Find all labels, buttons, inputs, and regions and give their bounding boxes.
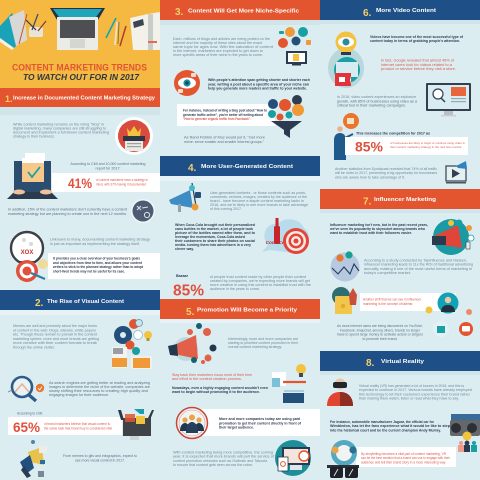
stat panel: 65%: of brand marketers believe that visual content is <box>44 422 110 426</box>
video intro text <box>370 35 464 43</box>
callout panel: storytelling <box>356 447 456 467</box>
icon: strategy badge <box>131 199 155 223</box>
stat: 85% trust: audience in the years to come. <box>210 287 260 291</box>
icon: video monitor with megaphone <box>446 161 467 184</box>
icon: crown printer badge <box>115 117 153 155</box>
influencer intro text: Influencer marketing isn't new, but in the past recent years, <box>330 223 428 227</box>
section 1 intro text: document and implement a full-blown content marketing <box>13 131 109 135</box>
Rand Fishkin quote: niche: serve smaller and smaller interest groups." <box>184 140 265 144</box>
section 8 banner: 8. <box>366 358 375 369</box>
callout panel: overview: writers to stick to the planned strategy rather than to adopt <box>52 265 144 269</box>
promotion intro text: starting to prioritize content promotion in their <box>228 341 299 345</box>
section 2 intro text: more creative with their content formats to break <box>13 341 97 345</box>
section 2 intro text: through the online clutter. <box>13 346 55 350</box>
past marketers text: and effort in the content creation process. <box>172 377 242 381</box>
video growth text: critical tool in their marketing campaigns. <box>337 104 406 108</box>
promotion networks text: year, it is expected that more brands will pull the service of <box>173 455 274 459</box>
stat panel: 85% video: their content marketing strategy in the next few months. <box>390 145 462 149</box>
section 7 banner <box>320 189 480 209</box>
Rand Fishkin quote: As Rand Fishkin of Moz would put it, "Get more <box>184 136 265 140</box>
section 1 intro text: strategy in their business. <box>13 135 55 139</box>
stat: 85% trust: Bazaar <box>176 274 189 278</box>
section 6 banner: More Video Content <box>376 8 436 14</box>
search engines text <box>49 381 150 397</box>
promotion networks text: to ensure that content gets seen across the noise. <box>173 463 253 467</box>
section 7 banner: Influencer Marketing <box>374 197 437 203</box>
nowadays text <box>171 386 268 394</box>
Jaguar text: For instance, automobile manufacturer Jaguar, the official car for <box>330 420 435 424</box>
icon: eye with hands <box>174 70 200 96</box>
icon: rocket and folder <box>332 287 357 314</box>
15% text block: In addition, 15% of the content marketers don't currently have a content <box>8 208 127 212</box>
section 3 intro text: in the Internet, marketers are expected to get down to <box>173 49 263 53</box>
search engines text: slowly shifting their resources to creating high quality and <box>49 389 148 393</box>
CMI stat intro: According to CMI and 10,000 content marketing <box>70 162 146 166</box>
section 2 intro text: marketing sphere, more and more brands are getting <box>13 337 99 341</box>
promotion intro text: Interestingly, more and more companies are <box>228 337 298 341</box>
documenting text <box>50 238 150 246</box>
section 5 banner: Promotion Will Become a Priority <box>197 308 298 314</box>
icon: handshake and VR goggles <box>327 440 359 478</box>
section 7 banner: 7. <box>363 196 372 208</box>
icon: laptop with media cards <box>118 409 154 440</box>
attention span text: year, writing a post about a specific area of your niche can <box>208 82 309 86</box>
icon: strategy pin with target: XOX <box>21 250 33 256</box>
callout panel: storytelling: audience and tell their brand story in a more interesting way. <box>361 460 446 464</box>
callout panel: instance: "How to generate organic traffic from Facebook". <box>183 117 251 121</box>
icon: Coca-Cola bottle and target <box>262 218 309 254</box>
Coca-Cola text: clever way. <box>175 247 194 251</box>
TapInfluence text: today's competitive market. <box>364 271 411 275</box>
section 2 intro text: Memes are well and precisely about the major forms <box>13 324 97 328</box>
callout panel: overview: It provides you a clear overview of your business's goals <box>53 256 140 260</box>
stat panel: 85% video: 85% <box>355 138 384 154</box>
Syndacast text: will be video in 2017, presenting a big opportunity for businesses <box>335 171 437 175</box>
icon: laptop with checkmark <box>7 153 58 199</box>
callout panel: influencers <box>360 293 456 311</box>
icon: laptop <box>50 8 105 50</box>
trend closing text: From memes to gifs and infographics, expect to <box>63 454 137 458</box>
user generated text: brand - have become a staple content marketing tactic in <box>210 199 304 203</box>
past marketers text <box>172 373 252 381</box>
section 5 banner <box>160 299 320 319</box>
Google fact text: internet users look for videos related to a <box>381 63 452 67</box>
section 4 banner: More User-Generated Content <box>201 164 293 170</box>
icon: red megaphone with circles <box>432 219 474 255</box>
callout panel: instance <box>177 104 275 126</box>
past marketers text: Stay back then marketers focus most of their time <box>172 373 252 377</box>
panel: paid promotion <box>200 409 320 436</box>
section 3 intro text: same topic for ages now. With the saturation of content <box>173 45 273 49</box>
icon: funnel with circles <box>268 95 304 138</box>
icon: target people circle <box>176 408 208 438</box>
virtual reality text: Virtual reality (VR) has generated a lot of buzzes in 2016, and this is <box>359 384 464 388</box>
Coca-Cola text: When Coca-Cola brought out their personalized <box>175 223 255 227</box>
TapInfluence text: annually, making it one of the most useful forms of marketing in <box>364 267 472 271</box>
label: competition: This increases the competition for 2017 as <box>356 132 430 136</box>
icon: eye and video monitor <box>328 32 364 88</box>
TapInfluence text: According to a study conducted by TapInfluence and Nielsen, <box>364 258 467 262</box>
icon: zigzag chart with pins <box>330 251 360 282</box>
section 6 banner <box>320 0 480 20</box>
section 1 intro text <box>13 122 109 139</box>
15% text block <box>8 208 127 216</box>
CMI stat intro: report for 2017: <box>96 166 121 170</box>
section 1 intro text: While content marketing remains on the rising "blog" in <box>13 122 104 126</box>
Jaguar text: Wimbledon, has let the fans experience what it would be like to step <box>330 424 450 428</box>
user generated text: comments, reviews, images, created by the audience of the <box>210 195 307 199</box>
section 3 intro text <box>173 37 273 57</box>
influencer intro text: we've seen its popularity to skyrocket among brands who <box>329 227 425 231</box>
Coca-Cola text: picture of the bottles named after them, and to <box>175 231 255 235</box>
stat: 85% trust <box>173 274 311 300</box>
section 4 banner: 4. <box>188 163 197 174</box>
panel: paid promotion: their target audience. <box>219 426 254 430</box>
stat: 85% trust: created by companies, we're expecting more brands will get <box>210 279 310 283</box>
Syndacast text: Another statistics from Syndacast revealed that 74% of all traffic <box>335 167 437 171</box>
Syndacast text: who are aware how to take advantage of it. <box>335 175 405 179</box>
15% text block: marketing strategy but are planning to create one in the next 12 months. <box>8 212 127 216</box>
video growth text: growth, with 85% of businesses using video as a <box>337 99 417 103</box>
stat: 85% trust: 85% <box>173 282 204 300</box>
section 1 banner: 1. <box>5 94 13 104</box>
promotion networks text <box>173 450 274 467</box>
stat: 85% trust: of people trust content made by other people than content <box>210 275 306 279</box>
section 3 intro text: Each, millions of blogs and articles are being posted on the <box>173 37 270 41</box>
search engines text: images to determine the niche of the website, companies are <box>49 385 150 389</box>
search engines text: engaging images for their audience. <box>49 393 109 397</box>
label: according to CMI: According to CMI: <box>17 412 43 416</box>
section 1 banner <box>0 88 160 107</box>
callout panel: storytelling: can be the best medium that a brand can use to engage with their <box>361 456 451 460</box>
icon: analytics screens <box>275 440 311 476</box>
Google fact text: In fact, Google revealed that almost 48% of <box>381 58 454 62</box>
virtual reality text <box>359 384 472 401</box>
icon: chat circle <box>459 322 473 336</box>
user generated text: User-generated contents - or those contents such as posts, <box>210 191 306 195</box>
Jaguar text <box>330 420 450 432</box>
section 2 intro text <box>13 324 99 350</box>
attention span text: help you generate more readers and traffic to your website. <box>208 87 307 91</box>
attention span text: With people's attention span getting shorter and shorter each <box>208 78 310 82</box>
stat panel: 85% video <box>345 137 468 155</box>
section 3 banner: Content Will Get More Niche-Specific <box>188 8 299 14</box>
virtual reality text: expected to continue in 2017. Various brands have already employed <box>359 388 472 392</box>
stat panel: 85% video: of businesses are likely to begin or continue using video in <box>390 141 465 145</box>
icon: person wearing VR headset <box>327 378 353 406</box>
icon: megaphone with orbiting icons <box>168 323 216 364</box>
stat: 85% trust: more creative in using this content to establish trust with the <box>210 283 311 287</box>
search engines text: As search engines are getting better at reading and analyzing <box>49 381 150 385</box>
talents text <box>337 324 423 341</box>
header panel <box>0 0 160 88</box>
trend closing text: see more visual content in 2017. <box>75 458 125 462</box>
title: CONTENT MARKETING TRENDS <box>12 62 147 72</box>
section 3 intro text: more specific areas of their niche in the years to come. <box>173 53 263 57</box>
talents text: have to spend large money to activate actors or singers <box>337 333 423 337</box>
icon: bulb, hand and pen <box>272 364 306 403</box>
Coca-Cola text: leverage the momentum, Coca-Cola asked <box>175 235 245 239</box>
stat panel: 41%: mind, with 37% having it documented <box>96 182 146 186</box>
virtual reality text: this technology to let their customers experience their brand rather <box>359 392 471 396</box>
title: TO WATCH OUT FOR IN 2017 <box>23 72 139 82</box>
video intro text: content today in terms of grabbing people's attention. <box>370 39 460 43</box>
promotion networks text: With content marketing being more competitive, the coming <box>173 450 273 454</box>
TapInfluence text <box>364 258 473 275</box>
section 2 intro text: of content in the web: blogs, eBooks, white papers <box>13 328 96 332</box>
icon: pens and open notebook <box>106 12 160 50</box>
icon: woman portrait and badges <box>426 292 472 315</box>
Google fact text: product or service before they visit a store. <box>381 67 456 71</box>
callout panel: instance: For instance, instead of writing a blog post about "How to <box>183 108 267 112</box>
influencer intro text <box>329 223 428 235</box>
icon: people and thumbs-up monitor <box>278 27 311 66</box>
section 2 banner: The Rise of Visual Content <box>47 299 124 305</box>
section 3 intro text: internet and the majority of these sites about the exact <box>173 41 262 45</box>
stat panel: 65%: the same task that brand buy is considered vital <box>44 426 112 430</box>
Rand Fishkin quote <box>184 136 265 144</box>
icon: monitor with analytics <box>426 83 471 116</box>
title <box>12 62 147 82</box>
nowadays text: want to begin without promoting it to the audience. <box>171 390 260 394</box>
stat panel: 65%: 65% <box>13 419 41 435</box>
stat panel: 41%: 41% <box>68 175 92 191</box>
section 2 banner: 2. <box>35 298 44 309</box>
Coca-Cola text: their customers to share their photos on social <box>175 239 255 243</box>
documenting text: Unknown to many, documenting content marketing strategy <box>50 238 150 242</box>
callout panel: overview <box>48 253 160 279</box>
section 5 banner: 5. <box>186 307 195 318</box>
stat panel: 65% <box>8 417 122 435</box>
callout panel: influencers: Another shift that we can see in influencer <box>363 298 422 302</box>
section 4 banner <box>160 156 320 176</box>
section 3 banner: 3. <box>175 7 184 18</box>
callout panel: overview: short-lived trends may not be useful for its case. <box>53 269 125 273</box>
section 3 banner <box>160 0 320 20</box>
section 2 intro text: etc. Though these remain to prevail in the content <box>13 333 97 337</box>
talents text: to promote their brand. <box>362 337 398 341</box>
stat panel: 41% <box>52 173 160 192</box>
promotion intro text <box>228 337 299 349</box>
trend closing text <box>63 454 137 462</box>
Jaguar text: into the historical court and be the current champion Andy Murray. <box>330 428 441 432</box>
video intro text: Videos have become one of the most successful type of <box>370 35 464 39</box>
callout panel: overview: and objectives from time to time, and allows your content <box>53 261 143 265</box>
icon: strategy pin with target <box>11 232 48 282</box>
Coca-Cola text: media- turning them into advertisers in a very <box>175 243 251 247</box>
callout panel: instance: generate traffic online", you're better off writing about <box>183 113 264 117</box>
section 2 banner <box>0 290 160 310</box>
video growth text: In 2016, video content experiences an explosive <box>337 95 416 99</box>
documenting text: is just as important as implementing the strategy itself. <box>50 242 140 246</box>
talents text: As more internet users are being discovered on YouTube, <box>337 324 423 328</box>
section 6 banner: 6. <box>363 8 372 19</box>
section 1 banner: Increase in Documented Content Marketing Strategy <box>13 96 155 102</box>
icon: Coca-Cola bottle and target: Coca-Cola <box>266 240 289 245</box>
icon: megaphone with social icons <box>20 440 47 478</box>
Google fact text <box>381 58 456 71</box>
icon: gears and documents <box>112 319 152 369</box>
icon: magnifier with check <box>8 377 44 401</box>
user generated text: of this coming 2017. <box>210 207 242 211</box>
section 8 banner: Virtual Reality <box>381 359 425 365</box>
nowadays text: Nowadays, even a highly engaging content wouldn't even <box>172 386 268 390</box>
Coca-Cola text <box>175 223 255 251</box>
attention span text <box>208 78 310 91</box>
Coca-Cola text: cans bottles in the market, a lot of people took <box>175 227 253 231</box>
icon: notebooks and pencils <box>0 10 46 50</box>
icon: businessman with thumbs-up bubble <box>334 113 359 160</box>
user generated text <box>210 191 308 211</box>
section 1 intro text: digital marketing, many companies are still struggling to <box>13 126 106 130</box>
icon: VR viewer, coin and people <box>450 414 480 452</box>
video growth text <box>337 95 417 108</box>
icon: megaphone social <box>169 183 201 212</box>
CMI stat intro <box>70 162 146 170</box>
callout panel: influencers: marketing is the concept of talents: <box>363 302 413 306</box>
talents text: Facebook, Snapchat, among others, brands no longer <box>340 328 421 332</box>
TapInfluence text: influencer marketing leads to 11x the ROI of traditional advertising <box>364 263 473 267</box>
panel: paid promotion: promotion to get their content directly in front of <box>219 421 302 425</box>
icon: thumbs-up circle <box>433 321 449 337</box>
virtual reality text: than making them watch, listen or read what they have to say. <box>359 397 459 401</box>
influencer intro text: want to establish trust with their followers easier. <box>329 231 412 235</box>
panel: paid promotion: More and more companies today are using paid <box>219 417 300 421</box>
callout panel: storytelling: By storytelling becomes a vital part of content marketing, VR <box>361 452 447 456</box>
section 8 banner <box>320 351 480 371</box>
promotion networks text: content promotion networks such as Outbrain and Taboola <box>173 459 267 463</box>
promotion intro text: overall content marketing strategy. <box>228 345 282 349</box>
Syndacast text <box>335 167 437 179</box>
user generated text: 2016, and we're likely to see more brands to take advantage <box>210 203 308 207</box>
stat panel: 41%: of content marketers have a strategy in <box>96 178 148 182</box>
